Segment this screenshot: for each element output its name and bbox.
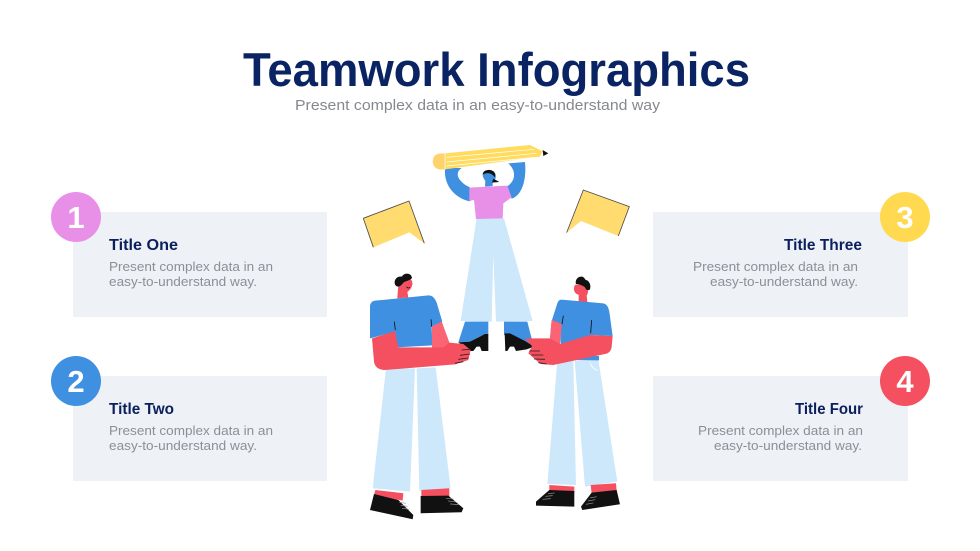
figure: top person with pencil (433, 145, 548, 219)
panel: title four: 4 (896, 364, 914, 399)
head (574, 285, 588, 302)
panel: title three: 3 (896, 200, 914, 235)
title: Teamwork Infographics (243, 43, 750, 96)
panel: title two: 2 (67, 364, 85, 399)
panel: title three: easy-to-understand way. (710, 274, 858, 289)
pencil (433, 145, 543, 169)
socks (374, 490, 403, 501)
panel: title three (653, 192, 930, 317)
panel: title four (653, 356, 930, 481)
panel: title three: Title Three (784, 237, 862, 254)
arm (525, 320, 613, 365)
panel: title two: Present complex data in an (109, 423, 273, 438)
icon: right speech bubble (567, 190, 629, 236)
right arm (507, 162, 525, 199)
panel: title one: 1 (67, 200, 85, 235)
panel: title two (51, 356, 327, 481)
figure: right man (525, 277, 620, 510)
subtitle: Present complex data in an easy-to-understand way (295, 97, 661, 114)
shirt (370, 295, 442, 347)
arm (372, 322, 471, 370)
panel: title two: easy-to-understand way. (109, 438, 257, 453)
figure: left man (370, 274, 471, 519)
panel: title four: Present complex data in an (698, 423, 863, 438)
figure: lower legs and boots of top person (458, 322, 534, 351)
shirt (552, 300, 613, 344)
shirt (469, 186, 512, 219)
pants (373, 368, 415, 492)
left arm (445, 168, 470, 201)
pants (547, 361, 576, 485)
panel: title three: Present complex data in an (693, 259, 858, 274)
panel: title one (51, 192, 327, 317)
panel: title one: Title One (109, 237, 178, 254)
shoes (370, 494, 413, 519)
icon: left speech bubble (363, 201, 424, 247)
head (483, 171, 496, 187)
panel: title four: easy-to-understand way. (714, 438, 862, 453)
panel: title two: Title Two (109, 401, 174, 418)
socks (549, 485, 574, 493)
head (397, 279, 412, 298)
panel: title one: easy-to-understand way. (109, 274, 257, 289)
panel: title four: Title Four (795, 401, 863, 418)
figure: top person pants (461, 218, 533, 322)
shoes (536, 490, 574, 507)
panel: title one: Present complex data in an (109, 259, 273, 274)
